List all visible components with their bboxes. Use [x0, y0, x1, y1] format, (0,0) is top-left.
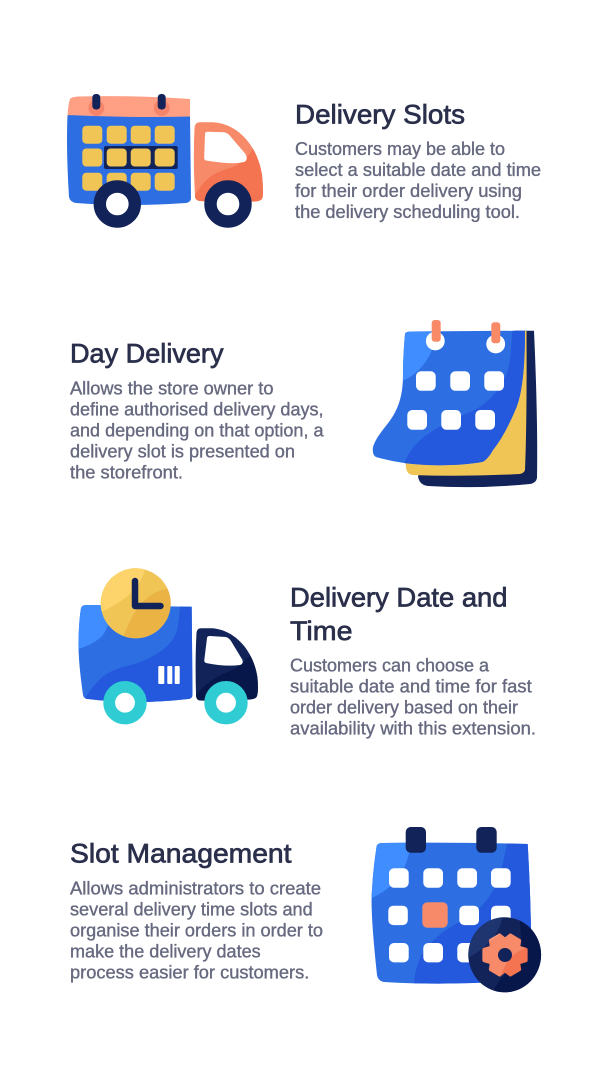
text block: Allows administrators to create	[70, 878, 321, 898]
icon: tear-off calendar	[365, 320, 537, 487]
text block: suitable date and time for fast	[290, 677, 532, 697]
icon: calendar with gear	[365, 827, 545, 997]
icon: calendar truck	[67, 94, 270, 222]
panel: day delivery	[70, 320, 537, 487]
icon: clock truck	[75, 568, 262, 718]
heading	[290, 583, 508, 646]
text block: Customers can choose a	[290, 656, 490, 676]
text block: Allows the store owner to	[70, 378, 274, 398]
heading: Delivery Slots	[295, 99, 465, 129]
text block	[295, 139, 541, 222]
text block: make the delivery dates	[70, 941, 261, 961]
text block	[70, 878, 323, 982]
text block: several delivery time slots and	[70, 899, 313, 919]
heading: Slot Management	[70, 839, 292, 869]
text block	[70, 378, 324, 482]
text block: Customers may be able to	[295, 139, 505, 159]
panel: delivery slots	[67, 94, 541, 222]
heading: Time	[290, 616, 352, 646]
text block: order delivery based on their	[290, 698, 518, 718]
heading: Delivery Date and	[290, 583, 508, 613]
text block: define authorised delivery days,	[70, 399, 324, 419]
text block: availability with this extension.	[290, 719, 536, 739]
infographic	[67, 94, 542, 992]
text block: delivery slot is presented on	[70, 441, 295, 461]
text block	[290, 656, 536, 739]
text block: and depending on that option, a	[70, 420, 324, 440]
text block: the delivery scheduling tool.	[295, 202, 520, 222]
panel: delivery date and time	[75, 568, 536, 739]
panel: slot management	[70, 827, 545, 997]
text block: organise their orders in order to	[70, 920, 323, 940]
text block: for their order delivery using	[295, 181, 522, 201]
heading: Day Delivery	[70, 339, 224, 369]
text block: select a suitable date and time	[295, 160, 541, 180]
text block: process easier for customers.	[70, 962, 309, 982]
text block: the storefront.	[70, 462, 183, 482]
